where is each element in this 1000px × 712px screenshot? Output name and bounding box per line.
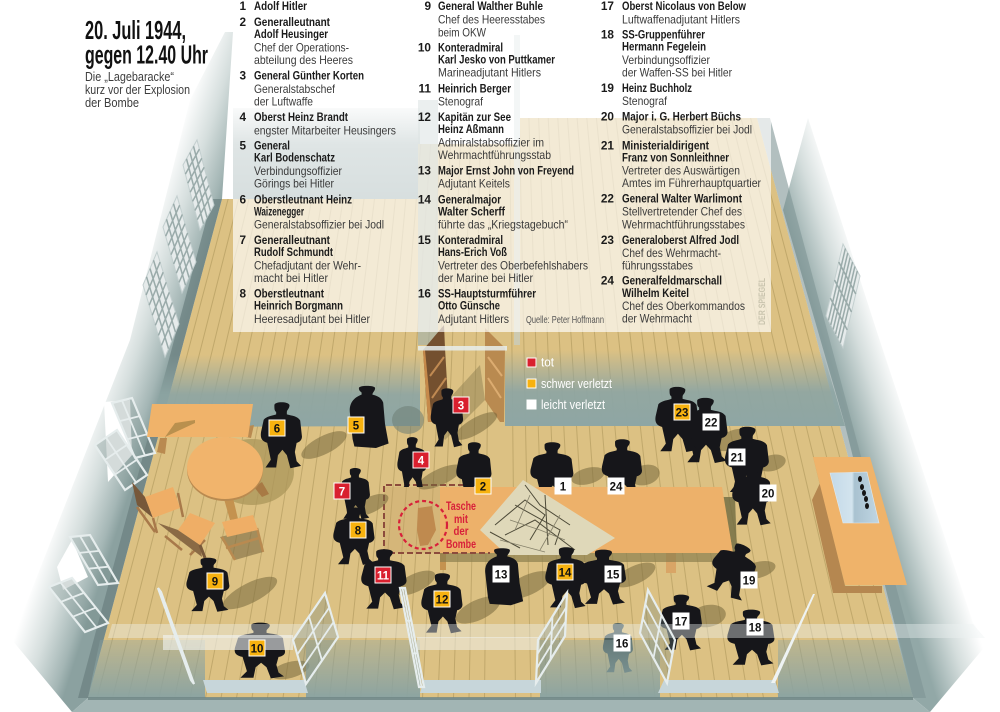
entry 23: Generaloberst Alfred Jodl (622, 233, 739, 247)
entry 16: Adjutant Hitlers (438, 312, 509, 326)
list column 3 (601, 0, 761, 326)
entry 15: Vertreter des Oberbefehlshabers (438, 259, 588, 273)
bomb label: mit (454, 512, 468, 526)
badge 17 (673, 613, 689, 629)
entry 19: 19 (601, 81, 614, 95)
main table leg (440, 553, 446, 570)
entry 21: 21 (601, 138, 614, 152)
figure 18 body (727, 610, 774, 665)
entry 14 (418, 192, 568, 232)
entry 23: Chef des Wehrmacht- (622, 246, 721, 260)
figure 4: 4 (418, 456, 425, 468)
figure 21: 21 (731, 452, 744, 464)
entry 17: Luftwaffenadjutant Hitlers (622, 12, 740, 26)
open door 5 (640, 590, 675, 683)
figure shadows (219, 406, 788, 683)
entry 7: Rudolf Schmundt (254, 245, 333, 259)
entry 5: Karl Bodenschatz (254, 151, 335, 165)
figure 1: 1 (560, 482, 567, 494)
entry 12: Kapitän zur See (438, 110, 511, 124)
entry 2: Generalleutnant (254, 15, 330, 29)
figure 11: 11 (377, 570, 390, 582)
bomb label: Tasche (446, 499, 476, 513)
bomb zone dashed frame (384, 485, 490, 553)
entry 4: Oberst Heinz Brandt (254, 110, 348, 124)
entry 16: Otto Günsche (438, 299, 500, 313)
entry 19: Heinz Buchholz (622, 81, 692, 95)
entry 16: SS-Hauptsturmführer (438, 286, 536, 300)
figure 19 (702, 536, 764, 603)
entry 21: Ministerialdirigent (622, 138, 709, 152)
badge 16 (614, 635, 630, 651)
subtitle: der Bombe (85, 95, 139, 110)
figure 15 (580, 550, 626, 605)
entry 14: Generalmajor (438, 192, 501, 206)
entry 13 (418, 163, 574, 191)
entry 15 (418, 233, 588, 285)
lower-left window 2 (49, 535, 118, 632)
entry 19 (601, 81, 692, 108)
entry 2 (239, 15, 353, 67)
figure 21 (725, 427, 769, 493)
figure 13 (485, 548, 523, 605)
entry 24: Generalfeldmarschall (622, 274, 722, 288)
figure 3 (431, 388, 469, 447)
left wall (12, 32, 233, 712)
title: 20. Juli 1944, (85, 15, 186, 45)
entry 20: Major i. G. Herbert Büchs (622, 109, 741, 123)
entry 4 (239, 110, 396, 137)
entry 22: General Walter Warlimont (622, 191, 742, 205)
entry 8: Oberstleutnant (254, 286, 324, 300)
figure 19: 19 (743, 576, 755, 588)
entry 24: 24 (601, 274, 614, 288)
entry 19: Stenograf (622, 94, 668, 108)
entry 10: 10 (418, 41, 431, 55)
entry 16 (418, 286, 536, 326)
badge 10 (249, 640, 265, 656)
figure 9: 9 (212, 576, 218, 588)
figure 20 (732, 465, 776, 525)
entry 11 (419, 81, 511, 108)
entry 11: Stenograf (438, 94, 484, 108)
figure 1 (530, 442, 574, 494)
entry 24 (601, 274, 745, 326)
subtitle: Die „Lagebaracke“ (85, 69, 174, 84)
wall top bar (108, 624, 985, 638)
main table under-shadow (440, 553, 733, 562)
front wall segment left (88, 640, 205, 698)
entry 10: Marineadjutant Hitlers (438, 66, 541, 80)
entry 23: führungsstabes (622, 259, 693, 273)
map on table (480, 480, 615, 555)
figure 2 (456, 442, 492, 494)
entry 5: Görings bei Hitler (254, 177, 334, 191)
entry 8 (239, 286, 370, 326)
front wall segment centre (540, 640, 660, 698)
door step 3 (658, 680, 779, 693)
badge 16: 16 (616, 638, 628, 650)
entry 4: 4 (239, 110, 246, 124)
badge 10: 10 (251, 644, 263, 656)
back door (418, 325, 507, 422)
figure 14 (545, 547, 586, 608)
entry 15: Hans-Erich Voß (438, 245, 507, 259)
figure 20: 20 (762, 488, 774, 500)
entry 8: 8 (239, 286, 246, 300)
door gap shadow (436, 365, 485, 440)
entry 12: Heinz Aßmann (438, 122, 504, 136)
partition stripe (514, 35, 520, 345)
figure 5: 5 (353, 420, 360, 432)
source note: Quelle: Peter Hoffmann (526, 314, 604, 326)
entry 2: 2 (239, 15, 246, 29)
entry 11: 11 (419, 81, 431, 95)
subtitle: kurz vor der Explosion (85, 82, 190, 97)
bag with the bomb (417, 506, 436, 546)
bomb label: der (454, 524, 469, 538)
entry 5: Verbindungsoffizier (254, 164, 342, 178)
credit: DER SPIEGEL (757, 278, 767, 325)
badge 18 (747, 619, 763, 635)
entry 2: abteilung des Heeres (254, 53, 353, 67)
entry 18 (601, 28, 732, 80)
entry 3: der Luftwaffe (254, 94, 313, 108)
figure 8 (333, 507, 374, 565)
floor (88, 118, 913, 698)
bomb label: Bombe (446, 537, 476, 551)
entry 14: führte das „Kriegstagebuch“ (438, 218, 568, 232)
entry 12: 12 (418, 110, 431, 124)
entry 18: der Waffen-SS bei Hitler (622, 66, 732, 80)
entry 6 (239, 192, 384, 232)
main table leg right (666, 553, 676, 573)
entry 8: Heinrich Borgmann (254, 299, 343, 313)
figure 13: 13 (495, 570, 507, 582)
figure 23: 23 (676, 408, 688, 420)
bomb label (446, 499, 476, 551)
upper windows left wall (143, 140, 214, 357)
title: gegen 12.40 Uhr (85, 40, 208, 70)
legend panel (233, 0, 771, 332)
figure 9 (186, 558, 229, 612)
figure 17 body (660, 595, 702, 650)
entry 21: Franz von Sonnleithner (622, 150, 729, 164)
entry 4: engster Mitarbeiter Heusingers (254, 123, 396, 137)
entry 8: Heeresadjutant bei Hitler (254, 312, 370, 326)
entry 6: Generalstabsoffizier bei Jodl (254, 218, 384, 232)
round table (187, 437, 269, 520)
wall top bar highlight centre (417, 637, 540, 650)
entry 9 (424, 0, 545, 39)
wall slope right (757, 118, 926, 698)
figure 12: 12 (436, 594, 448, 606)
entry 15: 15 (418, 233, 431, 247)
list column 2 (418, 0, 588, 326)
entry 18: SS-Gruppenführer (622, 28, 705, 42)
wall top bar highlight left (163, 635, 293, 650)
entry 20: 20 (601, 109, 614, 123)
entry 3: 3 (239, 69, 246, 83)
figure 15: 15 (607, 570, 620, 582)
entry 18: Verbindungsoffizier (622, 53, 710, 67)
figure 7: 7 (339, 486, 345, 498)
figure 6: 6 (274, 424, 280, 436)
front wall segment right (778, 640, 913, 698)
subtitle (85, 69, 190, 110)
entry 20 (601, 109, 752, 137)
entry 23: 23 (601, 233, 614, 247)
entry 7 (239, 233, 361, 285)
entry 2: Adolf Heusinger (254, 27, 328, 41)
bottom dark line (88, 697, 913, 700)
bomb zone tint (384, 487, 440, 553)
entry 18: Hermann Fegelein (622, 40, 706, 54)
door step 1 (203, 680, 308, 693)
entry 17 (601, 0, 747, 26)
list column 1 (239, 0, 396, 326)
entry 3 (239, 69, 364, 108)
door step 2 (420, 680, 541, 693)
figure 14: 14 (559, 568, 572, 580)
entry 7: macht bei Hitler (254, 271, 328, 285)
entry 3: General Günther Korten (254, 69, 364, 83)
entry 9: beim OKW (438, 25, 487, 39)
desk plate (830, 472, 879, 523)
entry 24: der Wehrmacht (622, 312, 693, 326)
legend dead: tot (541, 356, 554, 370)
figure 22: 22 (705, 418, 717, 430)
figure 12 (421, 573, 462, 633)
open door 3 (400, 588, 424, 687)
figure 24: 24 (610, 482, 623, 494)
entry 10: Karl Jesko von Puttkamer (438, 52, 555, 66)
red dashed circle (399, 501, 447, 549)
central partition (418, 100, 438, 345)
open door 1 (158, 588, 194, 684)
entry 6: Waizenegger (254, 204, 304, 218)
entry 22: Stellvertretender Chef des (622, 205, 742, 219)
entry 14: 14 (418, 192, 431, 206)
legend severely injured: schwer verletzt (541, 377, 612, 391)
chair 1 (132, 482, 183, 533)
entry 12 (418, 110, 551, 162)
entry 1 (239, 0, 307, 13)
wall slope left (78, 199, 222, 698)
legend lightly injured: leicht verletzt (541, 398, 605, 412)
entry 7: Generalleutnant (254, 233, 330, 247)
figure 6 (261, 402, 302, 468)
entry 2: Chef der Operations- (254, 41, 349, 55)
entry 3: Generalstabschef (254, 82, 336, 96)
entry 7: Chefadjutant der Wehr- (254, 259, 361, 273)
open door 2 (293, 593, 338, 684)
badge 18: 18 (749, 622, 762, 634)
lower-left window 1 (95, 398, 155, 490)
entry 24: Chef des Oberkommandos (622, 299, 745, 313)
chair 3 (220, 515, 263, 560)
figure 8: 8 (355, 526, 362, 538)
side table (147, 404, 254, 454)
figure 11 (361, 549, 407, 609)
round table shadow (210, 439, 294, 505)
open door 4 (536, 593, 567, 683)
entry 21 (601, 138, 761, 190)
main table (440, 487, 733, 553)
title (85, 15, 208, 70)
legend (527, 356, 612, 412)
chair 2 (158, 513, 215, 558)
entry 16: 16 (418, 286, 431, 300)
entry 9: Chef des Heeresstabes (438, 12, 545, 26)
entry 15: der Marine bei Hitler (438, 271, 533, 285)
entry 13: 13 (418, 163, 431, 177)
entry 21: Vertreter des Auswärtigen (622, 163, 740, 177)
figure 4 (397, 437, 429, 493)
entry 23 (601, 233, 739, 273)
rear wall left of door (150, 355, 420, 427)
entry 12: Admiralstabsoffizier im (438, 135, 544, 149)
entry 10: Konteradmiral (438, 41, 503, 55)
figure 16 body (603, 623, 633, 673)
entry 18: 18 (601, 28, 614, 42)
open door 6 (771, 594, 815, 683)
bottom wall strip (72, 698, 930, 712)
entry 21: Amtes im Führerhauptquartier (622, 176, 761, 190)
figure 5 (348, 386, 389, 448)
entry 14: Walter Scherff (438, 204, 505, 218)
entry 13: Major Ernst John von Freyend (438, 163, 574, 177)
right wall (783, 118, 993, 712)
back wall behind floor (233, 108, 420, 199)
entry 22 (601, 191, 745, 231)
entry 5: General (254, 139, 290, 153)
main table shadow (723, 497, 737, 553)
figure 10 body (235, 623, 285, 678)
entry 5 (239, 139, 342, 191)
entry 5: 5 (239, 139, 246, 153)
desk (812, 457, 907, 593)
figure 23 (655, 387, 698, 452)
entry 7: 7 (239, 233, 246, 247)
desk marks (858, 476, 869, 509)
badge 17: 17 (675, 616, 687, 628)
entry 6: Oberstleutnant Heinz (254, 192, 352, 206)
entry 22: 22 (601, 191, 614, 205)
entry 10 (418, 41, 555, 80)
figure 7 (334, 468, 370, 519)
window right wall (826, 244, 860, 348)
entry 24: Wilhelm Keitel (622, 286, 689, 300)
rear wall right of door (505, 350, 845, 426)
entry 13: Adjutant Keitels (438, 177, 510, 191)
figure 22 (682, 398, 728, 463)
entry 12: Wehrmachtführungsstab (438, 148, 551, 162)
figure 3: 3 (458, 400, 464, 412)
entry 11: Heinrich Berger (438, 81, 511, 95)
figure 24 (602, 439, 642, 499)
front wall segment centre-left (306, 640, 420, 698)
entry 15: Konteradmiral (438, 233, 503, 247)
entry 22: Wehrmachtführungsstabes (622, 217, 745, 231)
entry 20: Generalstabsoffizier bei Jodl (622, 123, 752, 137)
figure 2: 2 (480, 482, 486, 494)
entry 6: 6 (239, 192, 246, 206)
